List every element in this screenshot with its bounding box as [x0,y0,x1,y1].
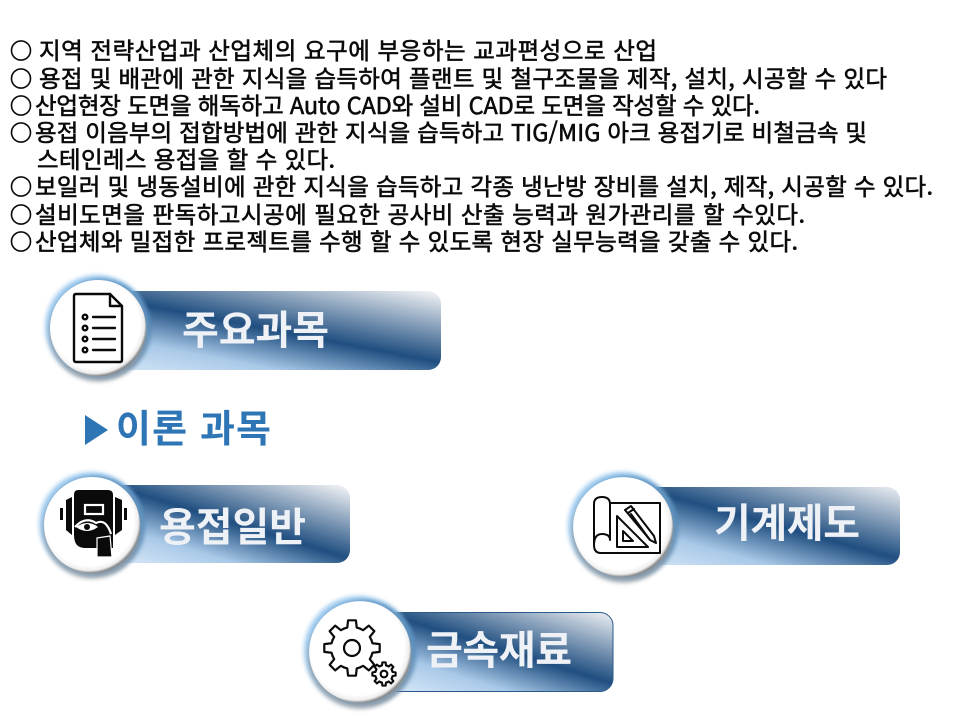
heading: theory subjects [85,398,271,453]
objective line 5: ○ [10,170,32,202]
objective line 4 continued: 스테인레스 용접을 할 수 있다. [37,141,335,175]
objective line 6: ○ [10,198,32,230]
text block: program objectives [10,32,933,257]
objective line 7: 산업체와 밀접한 프로젝트를 수행 할 수 있도록 현장 실무능력을 갖출 수 있다. [35,223,798,257]
objective line 1: ○ [10,34,32,66]
objective line 1: 지역 전략산업과 산업체의 요구에 부응하는 교과편성으로 산업 [39,32,657,66]
objective line 4: ○ [10,116,32,148]
banner label: 용접일반 [159,495,306,553]
objective line 5: 보일러 및 냉동설비에 관한 지식을 습득하고 각종 냉난방 장비를 설치, 제작, 시공할 수 있다. [35,168,933,202]
icon: document list [74,294,122,362]
banner: mechanical drawing [568,472,900,583]
icon: gears [324,620,396,686]
banner: main subjects [45,275,441,382]
objective line 2: 용접 및 배관에 관한 지식을 습득하여 플랜트 및 철구조물을 제작, 설치, 시공할 수 있다 [39,60,887,94]
objective line 3: 산업현장 도면을 해독하고 Auto CAD와 설비 CAD로 도면을 작성할 수 있다. [35,87,760,121]
objective line 6: 설비도면을 판독하고시공에 필요한 공사비 산출 능력과 원가관리를 할 수있다. [35,196,805,230]
banner label: 기계제도 [714,491,860,549]
icon: welding mask [60,490,127,557]
objective line 7: ○ [10,225,32,257]
icon: blueprint with ruler and pencil [594,497,660,553]
banner label: 주요과목 [182,298,329,356]
banner label: 금속재료 [426,618,572,676]
objective line 4: 용접 이음부의 접합방법에 관한 지식을 습득하고 TIG/MIG 아크 용접기로 비철금속 및 [35,114,867,148]
objective line 3: ○ [10,89,32,121]
icon: triangle marker [85,415,108,445]
heading text: 이론 과목 [116,398,271,453]
objective line 2: ○ [10,62,32,94]
banner: metal materials [304,596,613,709]
banner: welding general [39,472,350,579]
